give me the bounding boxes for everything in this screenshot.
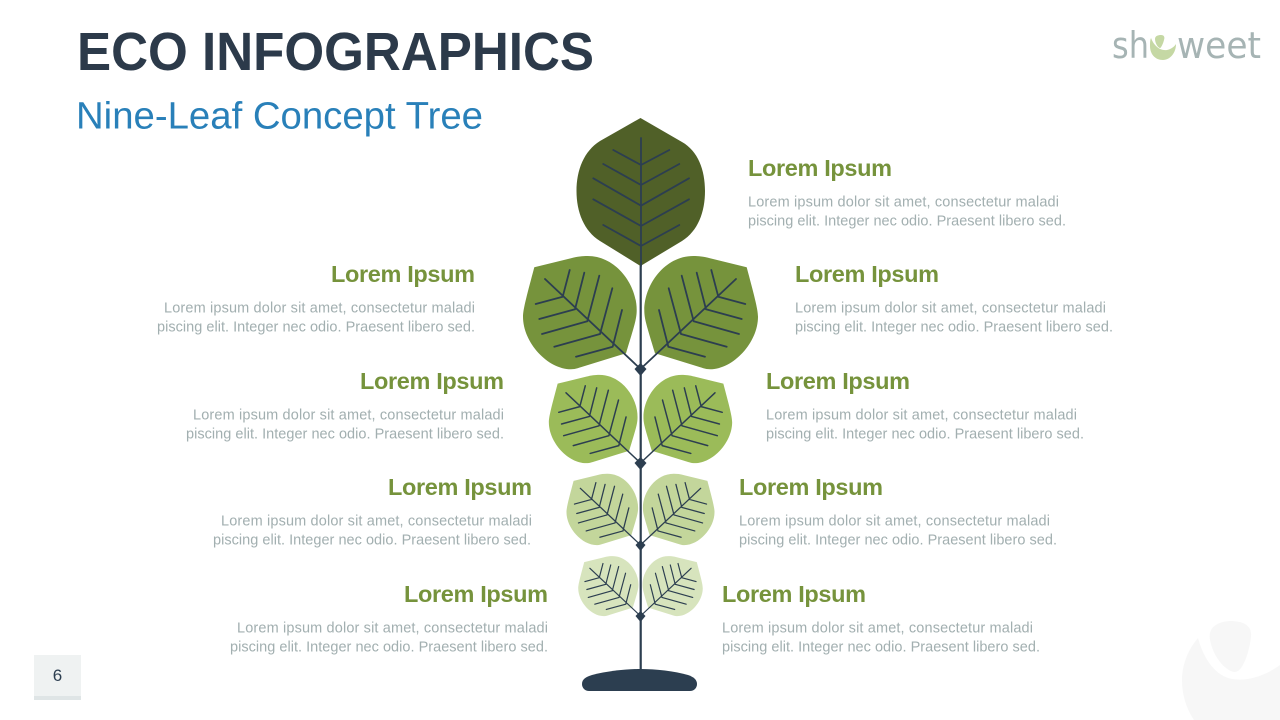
text block: row 4 right: piscing elit. Integer nec odio. Praesent libero sed. (739, 532, 1057, 548)
text block: row 5 left: Lorem Ipsum (404, 581, 548, 607)
text block: row 4 left (213, 474, 532, 548)
leaf 4: second row right (640, 375, 732, 463)
text block: row 5 right (722, 581, 1040, 656)
text block: row 5 right: Lorem Ipsum (722, 581, 866, 607)
tree stem and base (582, 262, 697, 691)
text block: row 3 left (186, 368, 504, 442)
leaf 8: bottom row right (640, 556, 703, 616)
leaf 7: third row left (566, 474, 640, 545)
text block: row 3 right (766, 368, 1084, 442)
showeet logo: sh (1112, 24, 1149, 67)
leaf 6: third row right (640, 474, 715, 545)
text block: row 2 left: piscing elit. Integer nec odio. Praesent libero sed. (157, 320, 475, 336)
text block: row 3 right: piscing elit. Integer nec odio. Praesent libero sed. (766, 426, 1084, 442)
text block: row 2 right: Lorem Ipsum (795, 261, 939, 287)
text block: top right: Lorem ipsum dolor sit amet, consectetur maladi (748, 194, 1059, 210)
text block: row 4 left: Lorem Ipsum (388, 474, 532, 500)
text block: row 5 left (230, 581, 548, 656)
leaf 1: top (576, 118, 705, 266)
text block: row 4 right (739, 474, 1057, 548)
showeet logo (1112, 24, 1261, 67)
text block: row 2 right: Lorem ipsum dolor sit amet, consectetur maladi (795, 300, 1106, 316)
text block: row 2 left: Lorem Ipsum (331, 261, 475, 287)
text block: row 2 left: Lorem ipsum dolor sit amet, consectetur maladi (164, 300, 475, 316)
leaf 2: upper right (640, 256, 758, 369)
text block: row 3 left: Lorem Ipsum (360, 368, 504, 394)
leaf 5: second row left (549, 375, 640, 463)
text block: row 5 left: piscing elit. Integer nec odio. Praesent libero sed. (230, 640, 548, 656)
watermark logo (1182, 621, 1280, 720)
text block: row 3 right: Lorem Ipsum (766, 368, 910, 394)
text block: row 3 right: Lorem ipsum dolor sit amet, consectetur maladi (766, 408, 1077, 424)
text block: row 2 left (157, 261, 475, 336)
text block: top right: Lorem Ipsum (748, 155, 892, 181)
page number box (34, 655, 81, 700)
text block: top right: piscing elit. Integer nec odio. Praesent libero sed. (748, 214, 1066, 230)
text block: row 5 right: piscing elit. Integer nec odio. Praesent libero sed. (722, 640, 1040, 656)
text block: row 2 right: piscing elit. Integer nec odio. Praesent libero sed. (795, 320, 1113, 336)
leaf 3: upper left (523, 256, 640, 369)
leaf 9: bottom row left (578, 556, 640, 616)
text block: row 4 right: Lorem ipsum dolor sit amet, consectetur maladi (739, 514, 1050, 530)
text block: top right (748, 155, 1066, 230)
showeet logo: weet (1177, 24, 1261, 67)
text block: row 3 left: piscing elit. Integer nec odio. Praesent libero sed. (186, 426, 504, 442)
subtitle: Nine-Leaf Concept Tree (76, 96, 483, 138)
text block: row 5 left: Lorem ipsum dolor sit amet, consectetur maladi (237, 620, 548, 636)
text block: row 4 left: piscing elit. Integer nec odio. Praesent libero sed. (213, 532, 531, 548)
text block: row 4 right: Lorem Ipsum (739, 474, 883, 500)
text block: row 4 left: Lorem ipsum dolor sit amet, consectetur maladi (221, 514, 532, 530)
text block: row 3 left: Lorem ipsum dolor sit amet, consectetur maladi (193, 408, 504, 424)
title: ECO INFOGRAPHICS (77, 22, 594, 82)
text block: row 5 right: Lorem ipsum dolor sit amet, consectetur maladi (722, 620, 1033, 636)
page number box: 6 (53, 666, 62, 685)
text block: row 2 right (795, 261, 1113, 336)
